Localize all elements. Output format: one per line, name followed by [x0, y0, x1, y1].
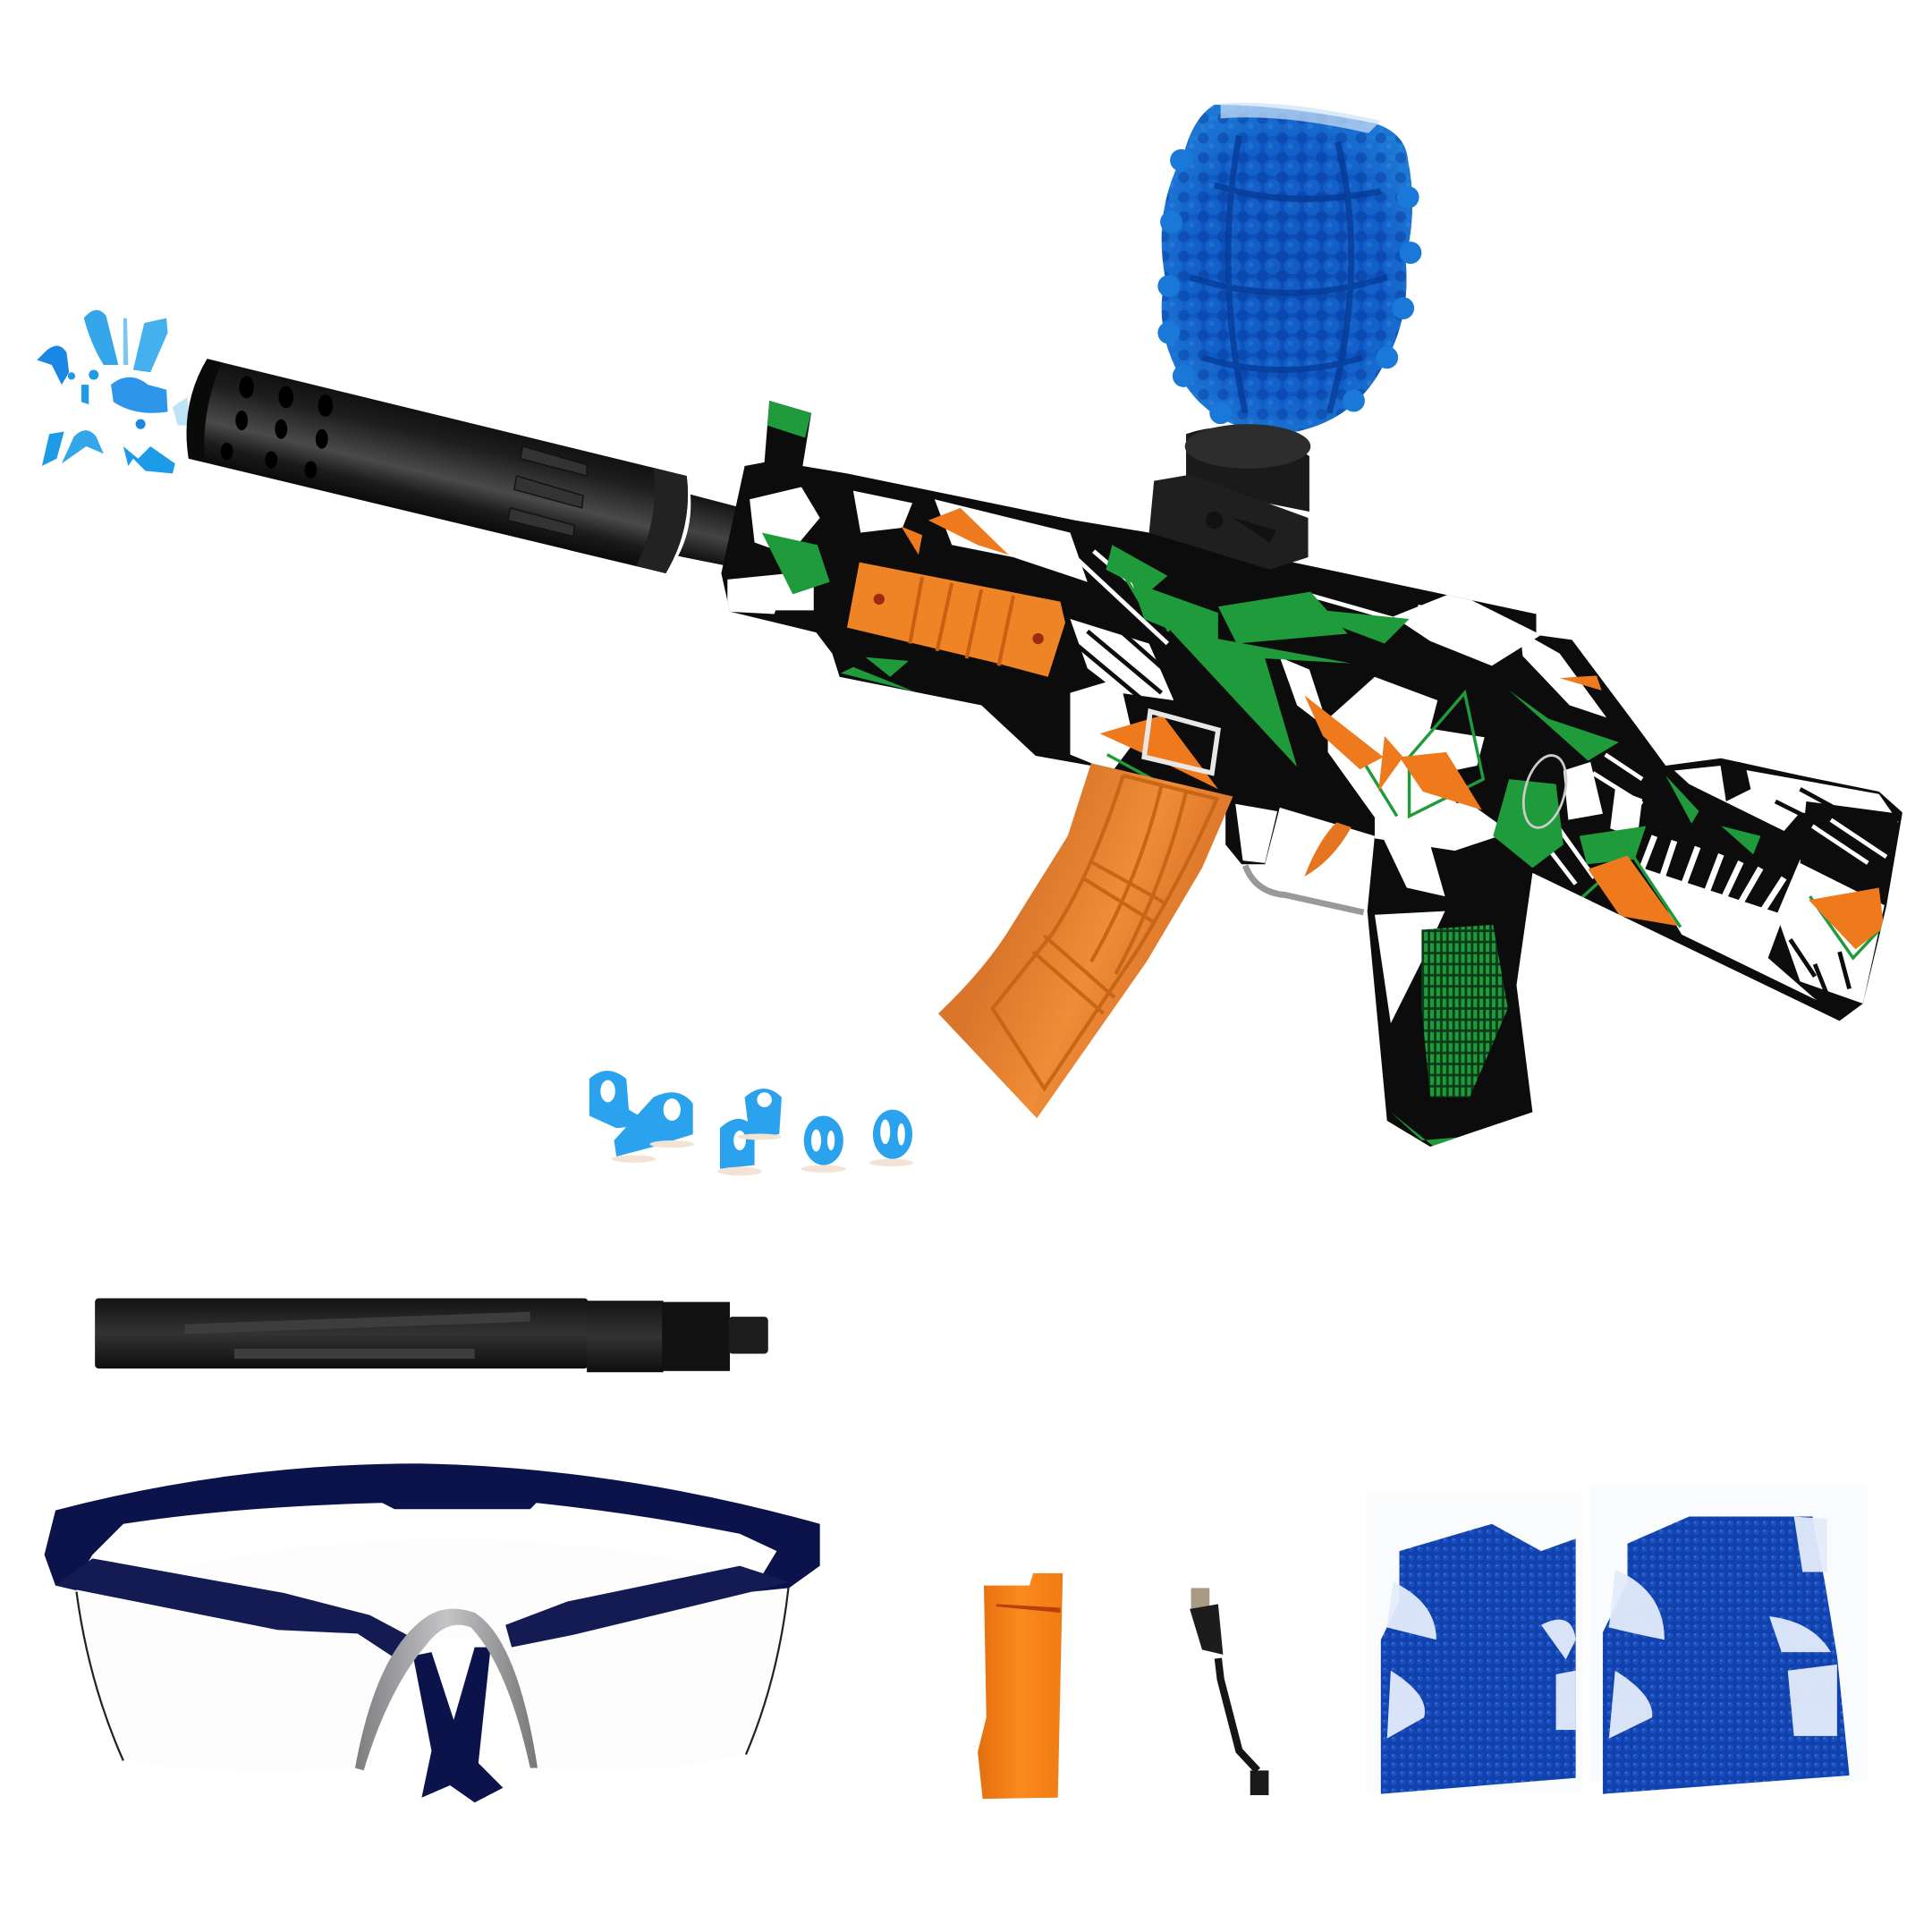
- rear sight loop: [1144, 711, 1218, 773]
- white camouflage patches: [727, 487, 1899, 1023]
- icon: burst gel balls: [589, 1071, 913, 1175]
- black stripe overlays: [1075, 606, 1868, 995]
- trigger guard: [1245, 866, 1364, 912]
- gun body with camouflage: [721, 401, 1902, 1147]
- orange curved magazine: [938, 763, 1233, 1118]
- safety lever: [1400, 752, 1482, 810]
- barrel ports: [221, 376, 333, 479]
- orange top rail: [847, 563, 1065, 677]
- safety goggles: [45, 1463, 820, 1802]
- nose piece: [355, 1609, 538, 1770]
- suppressor: [187, 359, 688, 573]
- trigger: [1304, 822, 1352, 877]
- spare long suppressor tube: [95, 1298, 768, 1372]
- gel ball grenade hopper: [1157, 103, 1421, 434]
- black blotches on stock: [1720, 762, 1899, 906]
- strap: [413, 1648, 503, 1802]
- brow frame: [45, 1463, 820, 1592]
- icon: water splash at muzzle: [37, 310, 190, 473]
- clear lens: [76, 1539, 789, 1772]
- barrel: [678, 495, 737, 566]
- stock sling loop: [1516, 750, 1573, 833]
- lower frame: [55, 1558, 407, 1659]
- gel bead bag left: [1366, 1493, 1583, 1794]
- orange accents: [902, 508, 1884, 949]
- green line work: [1107, 557, 1887, 958]
- magazine mount and hopper collar: [1149, 424, 1310, 570]
- white stripe overlays: [1642, 836, 1784, 919]
- USB charging cable: [1190, 1588, 1268, 1795]
- orange battery: [978, 1573, 1063, 1799]
- gel bead bag right: [1590, 1486, 1868, 1794]
- green camouflage patches: [762, 401, 1760, 1147]
